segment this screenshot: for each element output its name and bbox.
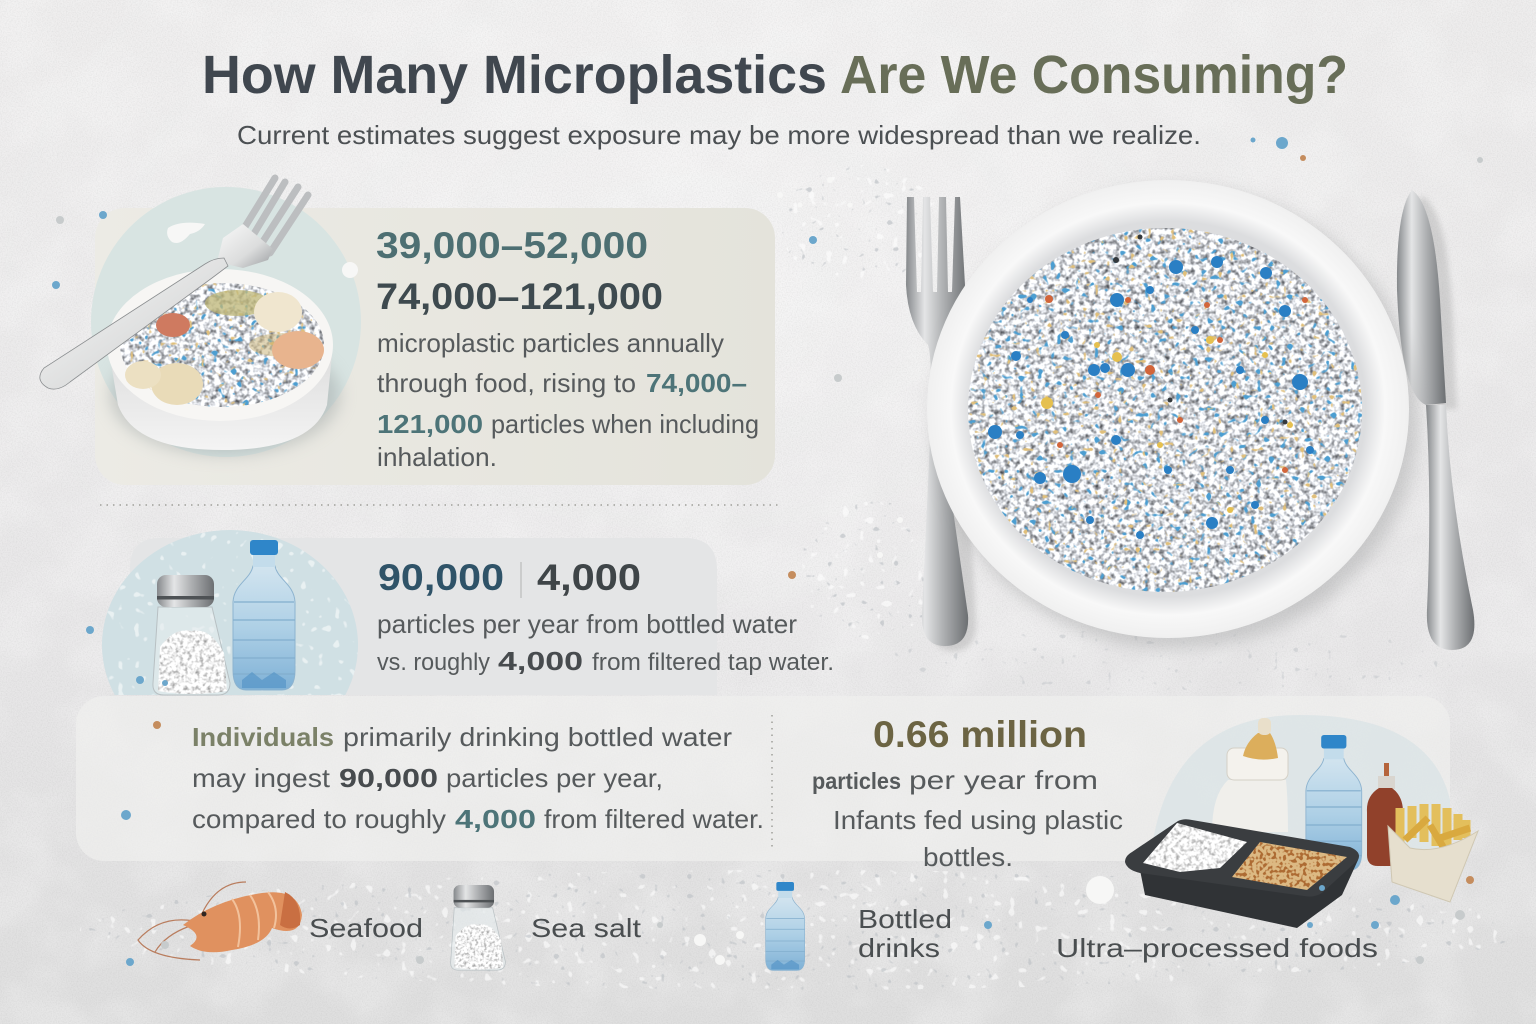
body text: microplastic particles annually	[377, 328, 724, 358]
title	[202, 45, 1348, 105]
label: seafood: Seafood	[309, 913, 423, 943]
icon: water bottle	[233, 540, 295, 690]
text: individuals drinking bottled water: particles per year,	[446, 763, 663, 793]
icon: black meal tray	[1125, 819, 1359, 928]
label: bottled drinks: drinks	[858, 933, 940, 963]
body text: through food, rising to	[377, 368, 636, 398]
text: individuals drinking bottled water: may ingest	[192, 763, 331, 793]
label: bottled drinks	[858, 904, 952, 963]
text: individuals drinking bottled water: compared to roughly	[192, 804, 446, 834]
microplastic particle heap	[968, 228, 1362, 592]
text: infants fed using plastic bottles: particles	[812, 768, 901, 794]
icon: water bottle	[1306, 735, 1362, 870]
icon: fries in paper box	[1388, 804, 1478, 902]
body text: inhalation.	[377, 442, 497, 472]
illustration: infant feeding and processed foods	[1125, 715, 1478, 928]
stat: infants: 0.66 million	[873, 714, 1087, 755]
body text: from filtered tap water.	[592, 649, 834, 676]
body text	[377, 328, 759, 472]
icon: salt shaker small	[451, 885, 505, 970]
body text: particles when including	[491, 409, 759, 439]
text: individuals drinking bottled water: from filtered water.	[544, 804, 764, 834]
stat: bottled water: 90,000	[378, 557, 504, 598]
body text: particles per year from bottled water	[377, 609, 797, 639]
panel background	[76, 696, 1450, 861]
stat: tap water: 4,000	[537, 557, 641, 598]
panel background	[130, 538, 717, 695]
body text: 121,000	[377, 409, 483, 439]
text: individuals drinking bottled water: 90,000	[339, 763, 438, 793]
label: bottled drinks: Bottled	[858, 904, 952, 934]
text: infants fed using plastic bottles: bottles.	[923, 842, 1013, 872]
title: Are We Consuming?	[840, 45, 1348, 105]
stat: food particles: 39,000–52,000	[376, 225, 648, 266]
icon: salt shaker	[153, 575, 230, 695]
text: individuals drinking bottled water	[192, 722, 764, 834]
title: How Many Microplastics	[202, 45, 827, 105]
icon: fork	[906, 197, 976, 651]
text: individuals drinking bottled water: Individuals	[192, 722, 334, 752]
icon: bowl of food with fork	[40, 178, 340, 455]
text: individuals drinking bottled water: primarily drinking bottled water	[343, 722, 732, 752]
stat: food plus inhalation particles: 74,000–121,000	[376, 276, 663, 317]
icon: baby bottle	[1212, 718, 1288, 832]
body text: 74,000–	[646, 368, 747, 398]
text: infants fed using plastic bottles	[812, 765, 1123, 872]
icon backdrop circle	[102, 530, 358, 695]
text: infants fed using plastic bottles: Infants fed using plastic	[833, 805, 1123, 835]
subtitle: Current estimates suggest exposure may be more widespread than we realize.	[237, 120, 1201, 150]
label: ultra-processed foods: Ultra–processed foods	[1056, 933, 1378, 963]
icon backdrop circle	[91, 187, 361, 457]
plate of microplastics with cutlery	[906, 180, 1474, 651]
plate	[933, 187, 1419, 649]
icon: shrimp	[138, 882, 302, 960]
text: individuals drinking bottled water: 4,000	[455, 804, 536, 834]
panel: bottled versus tap water	[102, 530, 834, 695]
body text: vs. roughly	[377, 649, 490, 676]
icon: knife	[1397, 190, 1474, 650]
panel: individuals and infants	[76, 696, 1450, 872]
text: infants fed using plastic bottles: per year from	[909, 765, 1098, 795]
body text	[377, 609, 834, 676]
body text: 4,000	[498, 646, 583, 676]
panel: food and inhalation estimates	[40, 178, 775, 485]
scattered microplastic particles	[52, 137, 1483, 966]
icon: bottle small	[766, 882, 805, 970]
panel background	[95, 208, 775, 485]
icon: sauce bottle	[1367, 763, 1403, 866]
label: sea salt: Sea salt	[531, 913, 642, 943]
